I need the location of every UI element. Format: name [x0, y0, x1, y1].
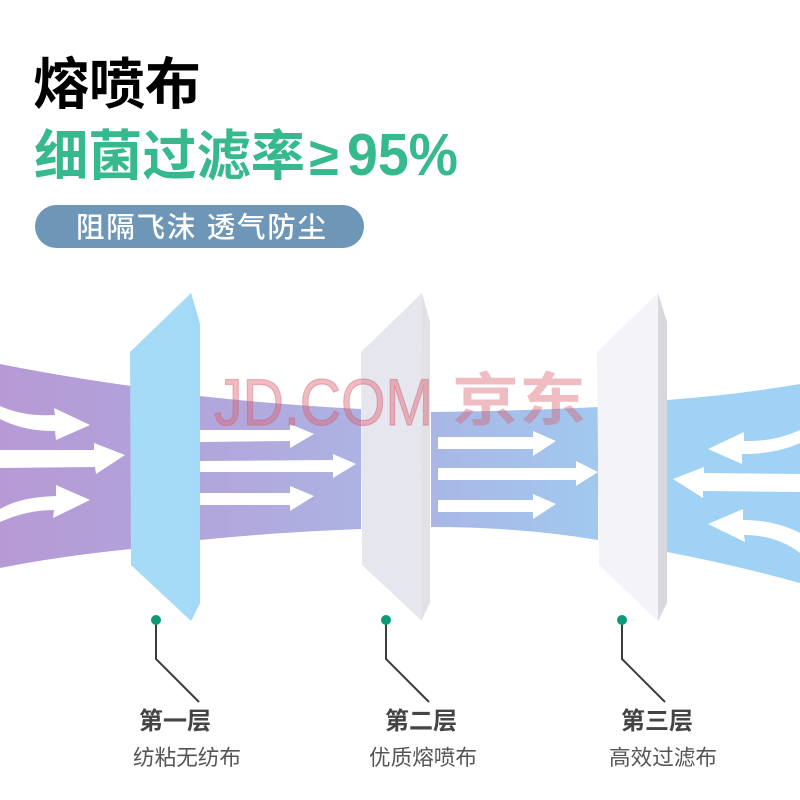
heading: bacterial filtration rate: 细菌过滤率	[34, 126, 305, 187]
filter layer one: blue sheet	[130, 293, 200, 621]
material name: 优质熔喷布	[369, 745, 477, 770]
air flow: between layer two and three	[431, 407, 598, 540]
air flow: right band with reversed arrows	[667, 384, 800, 583]
marker dot	[617, 615, 627, 625]
heading: bacterial filtration rate: ≥	[309, 127, 339, 187]
heading: bacterial filtration rate: 95%	[347, 122, 458, 188]
layer name: 第一层	[139, 708, 211, 735]
air flow: between layer one and two	[200, 396, 361, 540]
watermark: JD.COM	[214, 365, 586, 439]
arrow: upper left	[0, 406, 90, 440]
arrow: upper	[200, 424, 314, 448]
layer name: 第三层	[621, 708, 693, 735]
badge: blocks droplets, breathable, dustproof	[35, 205, 364, 248]
callout: layer three	[609, 615, 717, 770]
material name: 高效过滤布	[609, 745, 717, 770]
watermark: JD.COM: JD.COM	[214, 365, 433, 439]
arrow: middle	[438, 461, 598, 486]
heading: bacterial filtration rate	[34, 122, 458, 188]
leader line	[156, 620, 199, 702]
arrow: middle right	[673, 467, 800, 498]
leader line	[622, 620, 665, 702]
badge: blocks droplets, breathable, dustproof: 阻隔飞沫 透气防尘	[76, 212, 326, 244]
arrow: lower left	[0, 485, 90, 522]
arrow: upper right	[708, 430, 800, 464]
arrow: upper	[438, 431, 556, 456]
material name: 纺粘无纺布	[133, 745, 241, 770]
air flow: left band with arrows	[0, 364, 131, 568]
watermark: JD.COM: 京东	[452, 368, 586, 433]
filter layer three: white sheet	[597, 293, 667, 621]
marker dot	[151, 615, 161, 625]
filter layer two: grey sheet	[361, 293, 430, 621]
callout: layer two	[369, 615, 477, 770]
arrow: lower	[200, 486, 314, 511]
layer name: 第二层	[385, 708, 457, 735]
leader line	[386, 620, 429, 702]
title: melt-blown fabric: 熔喷布	[33, 53, 201, 116]
callout: layer one	[133, 615, 241, 770]
marker dot	[381, 615, 391, 625]
arrow: middle	[200, 454, 356, 478]
arrow: lower	[438, 494, 556, 519]
arrow: lower right	[708, 509, 800, 553]
arrow: middle left	[0, 443, 125, 474]
